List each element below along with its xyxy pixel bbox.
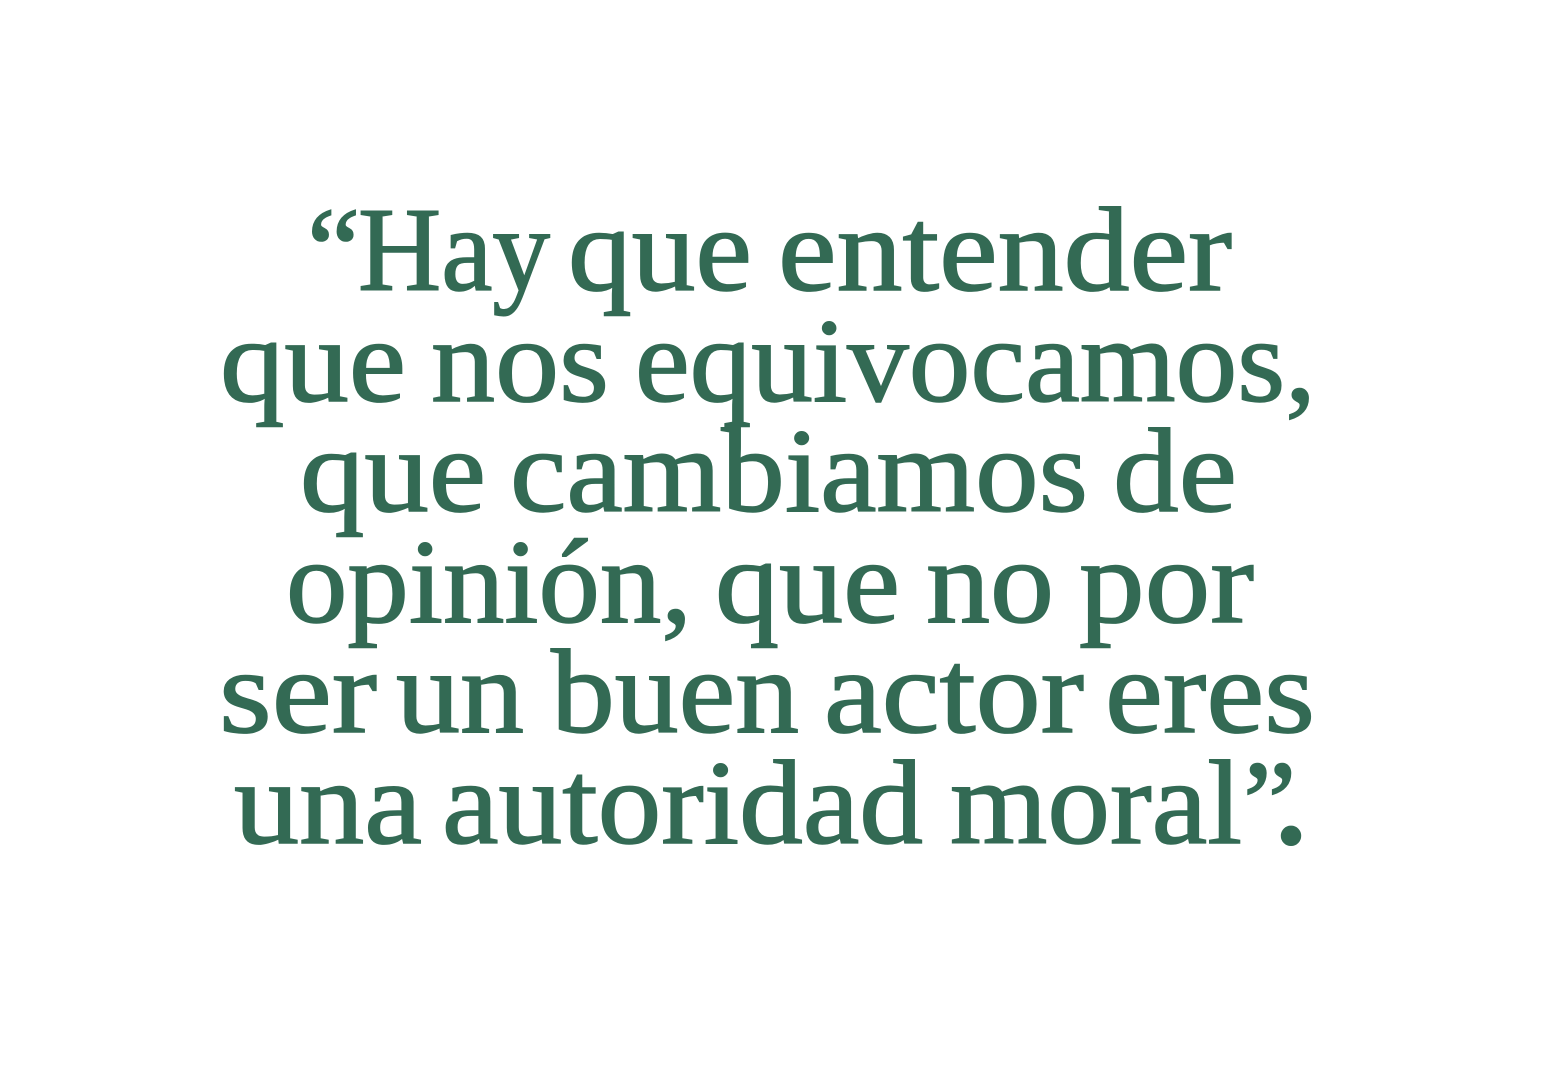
quote text: de bbox=[1113, 404, 1237, 537]
quote text: buen bbox=[551, 625, 799, 758]
quote text: ” bbox=[1243, 736, 1296, 869]
quote text: . bbox=[1271, 700, 1311, 878]
quote text: no bbox=[926, 515, 1054, 648]
quote text: “ bbox=[307, 183, 360, 316]
quote text: opinión, bbox=[286, 515, 692, 648]
quote text: que bbox=[220, 294, 406, 427]
quote text: actor bbox=[824, 625, 1084, 758]
quote text: equivocamos, bbox=[635, 294, 1316, 427]
quote text: eres bbox=[1105, 625, 1315, 758]
quote text: un bbox=[396, 625, 524, 758]
quote text: que bbox=[715, 515, 900, 648]
quote text: nos bbox=[431, 294, 609, 427]
quote text: una bbox=[234, 736, 422, 869]
quote text: entender bbox=[778, 183, 1232, 316]
quote text: autoridad bbox=[442, 736, 923, 869]
quote text: Hay bbox=[358, 183, 550, 316]
quote text: que bbox=[568, 183, 752, 316]
quote text: por bbox=[1079, 515, 1254, 648]
quote text: que bbox=[300, 404, 486, 537]
quote text: moral bbox=[950, 736, 1242, 869]
quote text: ser bbox=[219, 625, 377, 758]
quote text: cambiamos bbox=[510, 404, 1088, 537]
